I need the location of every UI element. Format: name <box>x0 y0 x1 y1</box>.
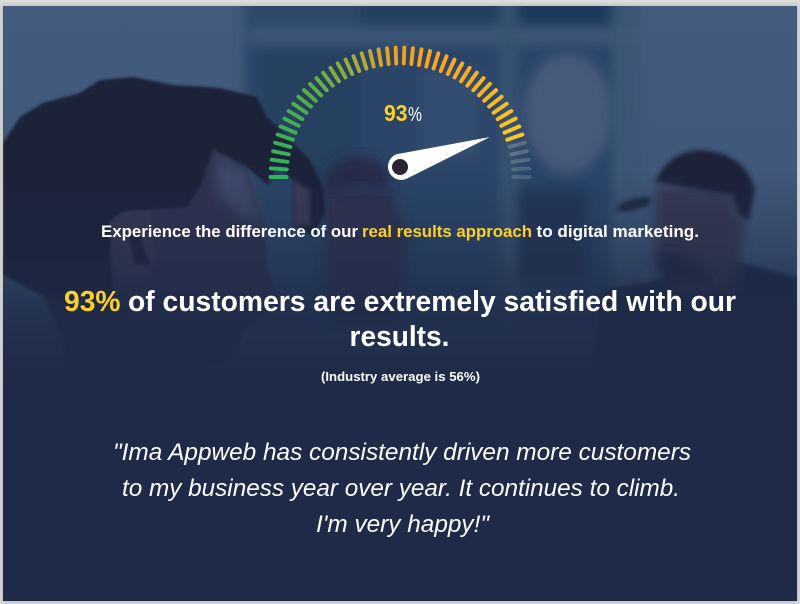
customer quote: "Ima Appweb has consistently driven more customers <box>113 439 691 466</box>
headline statistic: of customers are extremely satisfied with our <box>128 286 736 318</box>
intro sentence: to digital marketing. <box>536 222 699 241</box>
intro sentence: real results approach <box>362 222 532 241</box>
industry average note: (Industry average is 56%) <box>321 369 480 384</box>
gauge ticks <box>270 48 530 177</box>
background person centre <box>321 152 408 294</box>
customer quote: I'm very happy!" <box>316 511 490 538</box>
headline statistic: results. <box>350 321 450 353</box>
gauge <box>270 48 530 180</box>
headline statistic <box>64 286 736 353</box>
gauge value: % <box>408 104 422 126</box>
gauge needle <box>388 137 490 180</box>
fade overlay <box>3 170 797 601</box>
decorative globe shape <box>524 53 612 173</box>
customer quote <box>113 439 691 538</box>
foreground man <box>3 76 326 323</box>
gauge value: 93 <box>384 100 408 126</box>
background person right <box>601 147 797 328</box>
customer quote: to my business year over year. It continues to climb. <box>122 475 680 502</box>
intro sentence: Experience the difference of our <box>101 222 358 241</box>
headline statistic: 93% <box>64 286 121 318</box>
